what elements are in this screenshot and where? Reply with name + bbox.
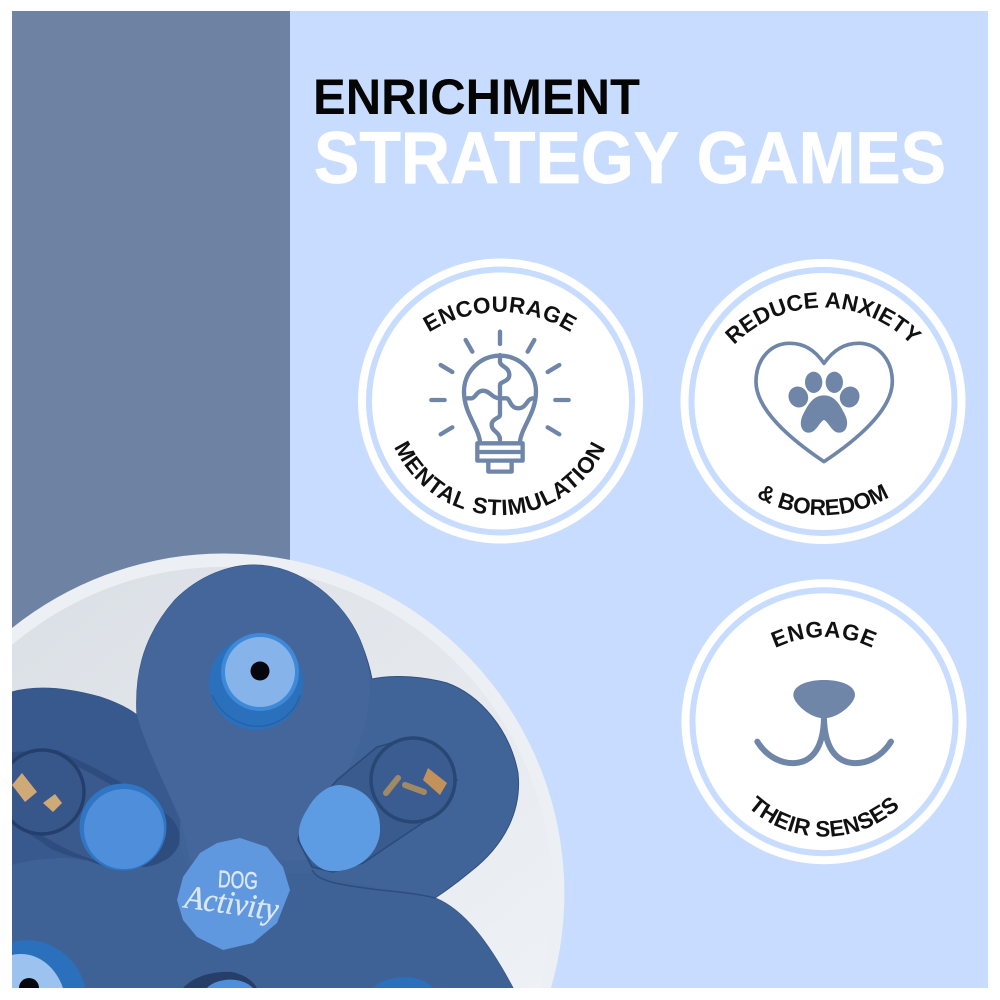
label: ENCOURAGE: ENCOURAGE — [422, 296, 578, 332]
badge disc — [680, 259, 966, 544]
label: & BOREDOM: & BOREDOM — [758, 484, 888, 516]
knob hole — [19, 978, 39, 988]
knob hole — [250, 662, 270, 680]
left disc — [80, 784, 166, 870]
badge: engage their senses — [682, 579, 966, 864]
badge text: DOG: DOG — [217, 866, 259, 895]
bottom-right knob — [373, 977, 433, 988]
label: ENGAGE: ENGAGE — [770, 622, 877, 648]
badge: Dog Activity — [177, 838, 290, 950]
badge disc — [358, 258, 643, 544]
right disc — [299, 785, 380, 871]
right bowl — [371, 738, 455, 822]
label: MENTAL STIMULATION: MENTAL STIMULATION — [394, 440, 605, 516]
icon: dog nose and mouth — [757, 680, 891, 763]
white plate — [12, 553, 564, 988]
bottom-centre slot — [183, 972, 257, 988]
left petal, darker — [12, 688, 180, 868]
badge disc — [682, 579, 966, 864]
panel: slate blue column — [12, 11, 290, 631]
badge: encourage mental stimulation — [358, 258, 643, 544]
left treats — [12, 773, 62, 812]
puzzle body — [12, 565, 519, 988]
lower body — [12, 845, 513, 988]
badge text: Activity: Activity — [181, 879, 281, 928]
bottom-left knob — [12, 940, 85, 988]
left treat slot — [0, 750, 179, 870]
photo: dog activity puzzle on plate — [0, 553, 564, 988]
heading: STRATEGY GAMES: STRATEGY GAMES — [314, 118, 946, 199]
icon: heart with paw — [756, 343, 892, 462]
right treat slot — [298, 737, 457, 872]
badge: reduce anxiety and boredom — [680, 259, 966, 544]
seam lines — [312, 870, 435, 898]
label: THEIR SENSES: THEIR SENSES — [752, 795, 898, 837]
left bowl — [0, 750, 84, 834]
label: REDUCE ANXIETY: REDUCE ANXIETY — [724, 292, 922, 344]
right treats — [386, 768, 447, 795]
blue knob — [209, 633, 303, 730]
icon: puzzle light bulb — [431, 332, 569, 472]
top petal with knob — [136, 565, 365, 730]
heading: ENRICHMENT: ENRICHMENT — [313, 69, 640, 125]
